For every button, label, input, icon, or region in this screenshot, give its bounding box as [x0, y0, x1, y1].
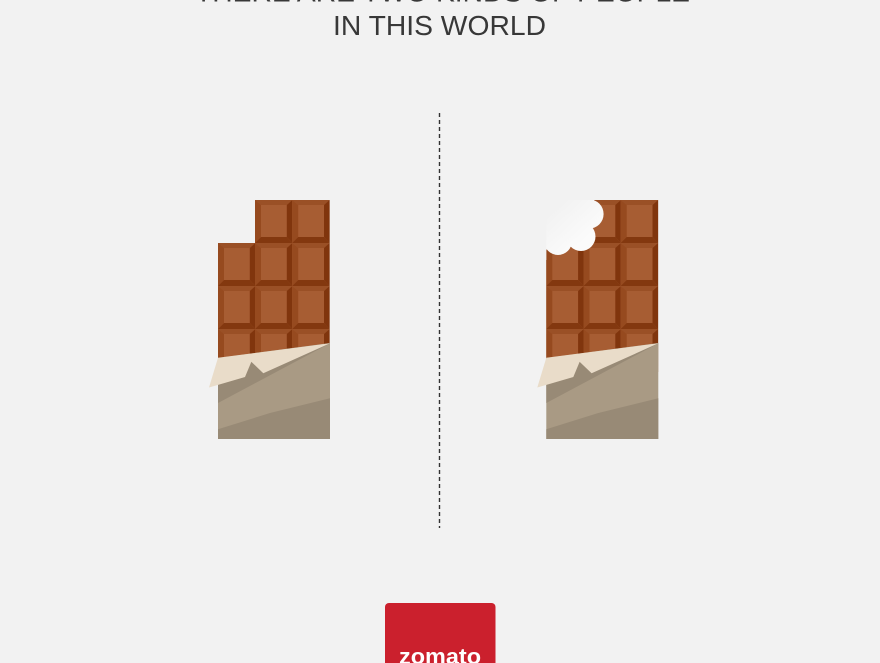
- chocolate pieces: [546, 200, 658, 372]
- wrapper: [209, 343, 330, 439]
- left chocolate bar: broken piece: [209, 200, 330, 439]
- right chocolate bar: bitten: [535, 190, 658, 439]
- title: [195, 0, 690, 41]
- chocolate pieces: [218, 200, 330, 372]
- bite mark: [535, 190, 604, 260]
- wrapper: [537, 343, 658, 439]
- title: IN THIS WORLD: [333, 10, 546, 41]
- zomato logo: [385, 603, 496, 663]
- divider: [438, 113, 440, 528]
